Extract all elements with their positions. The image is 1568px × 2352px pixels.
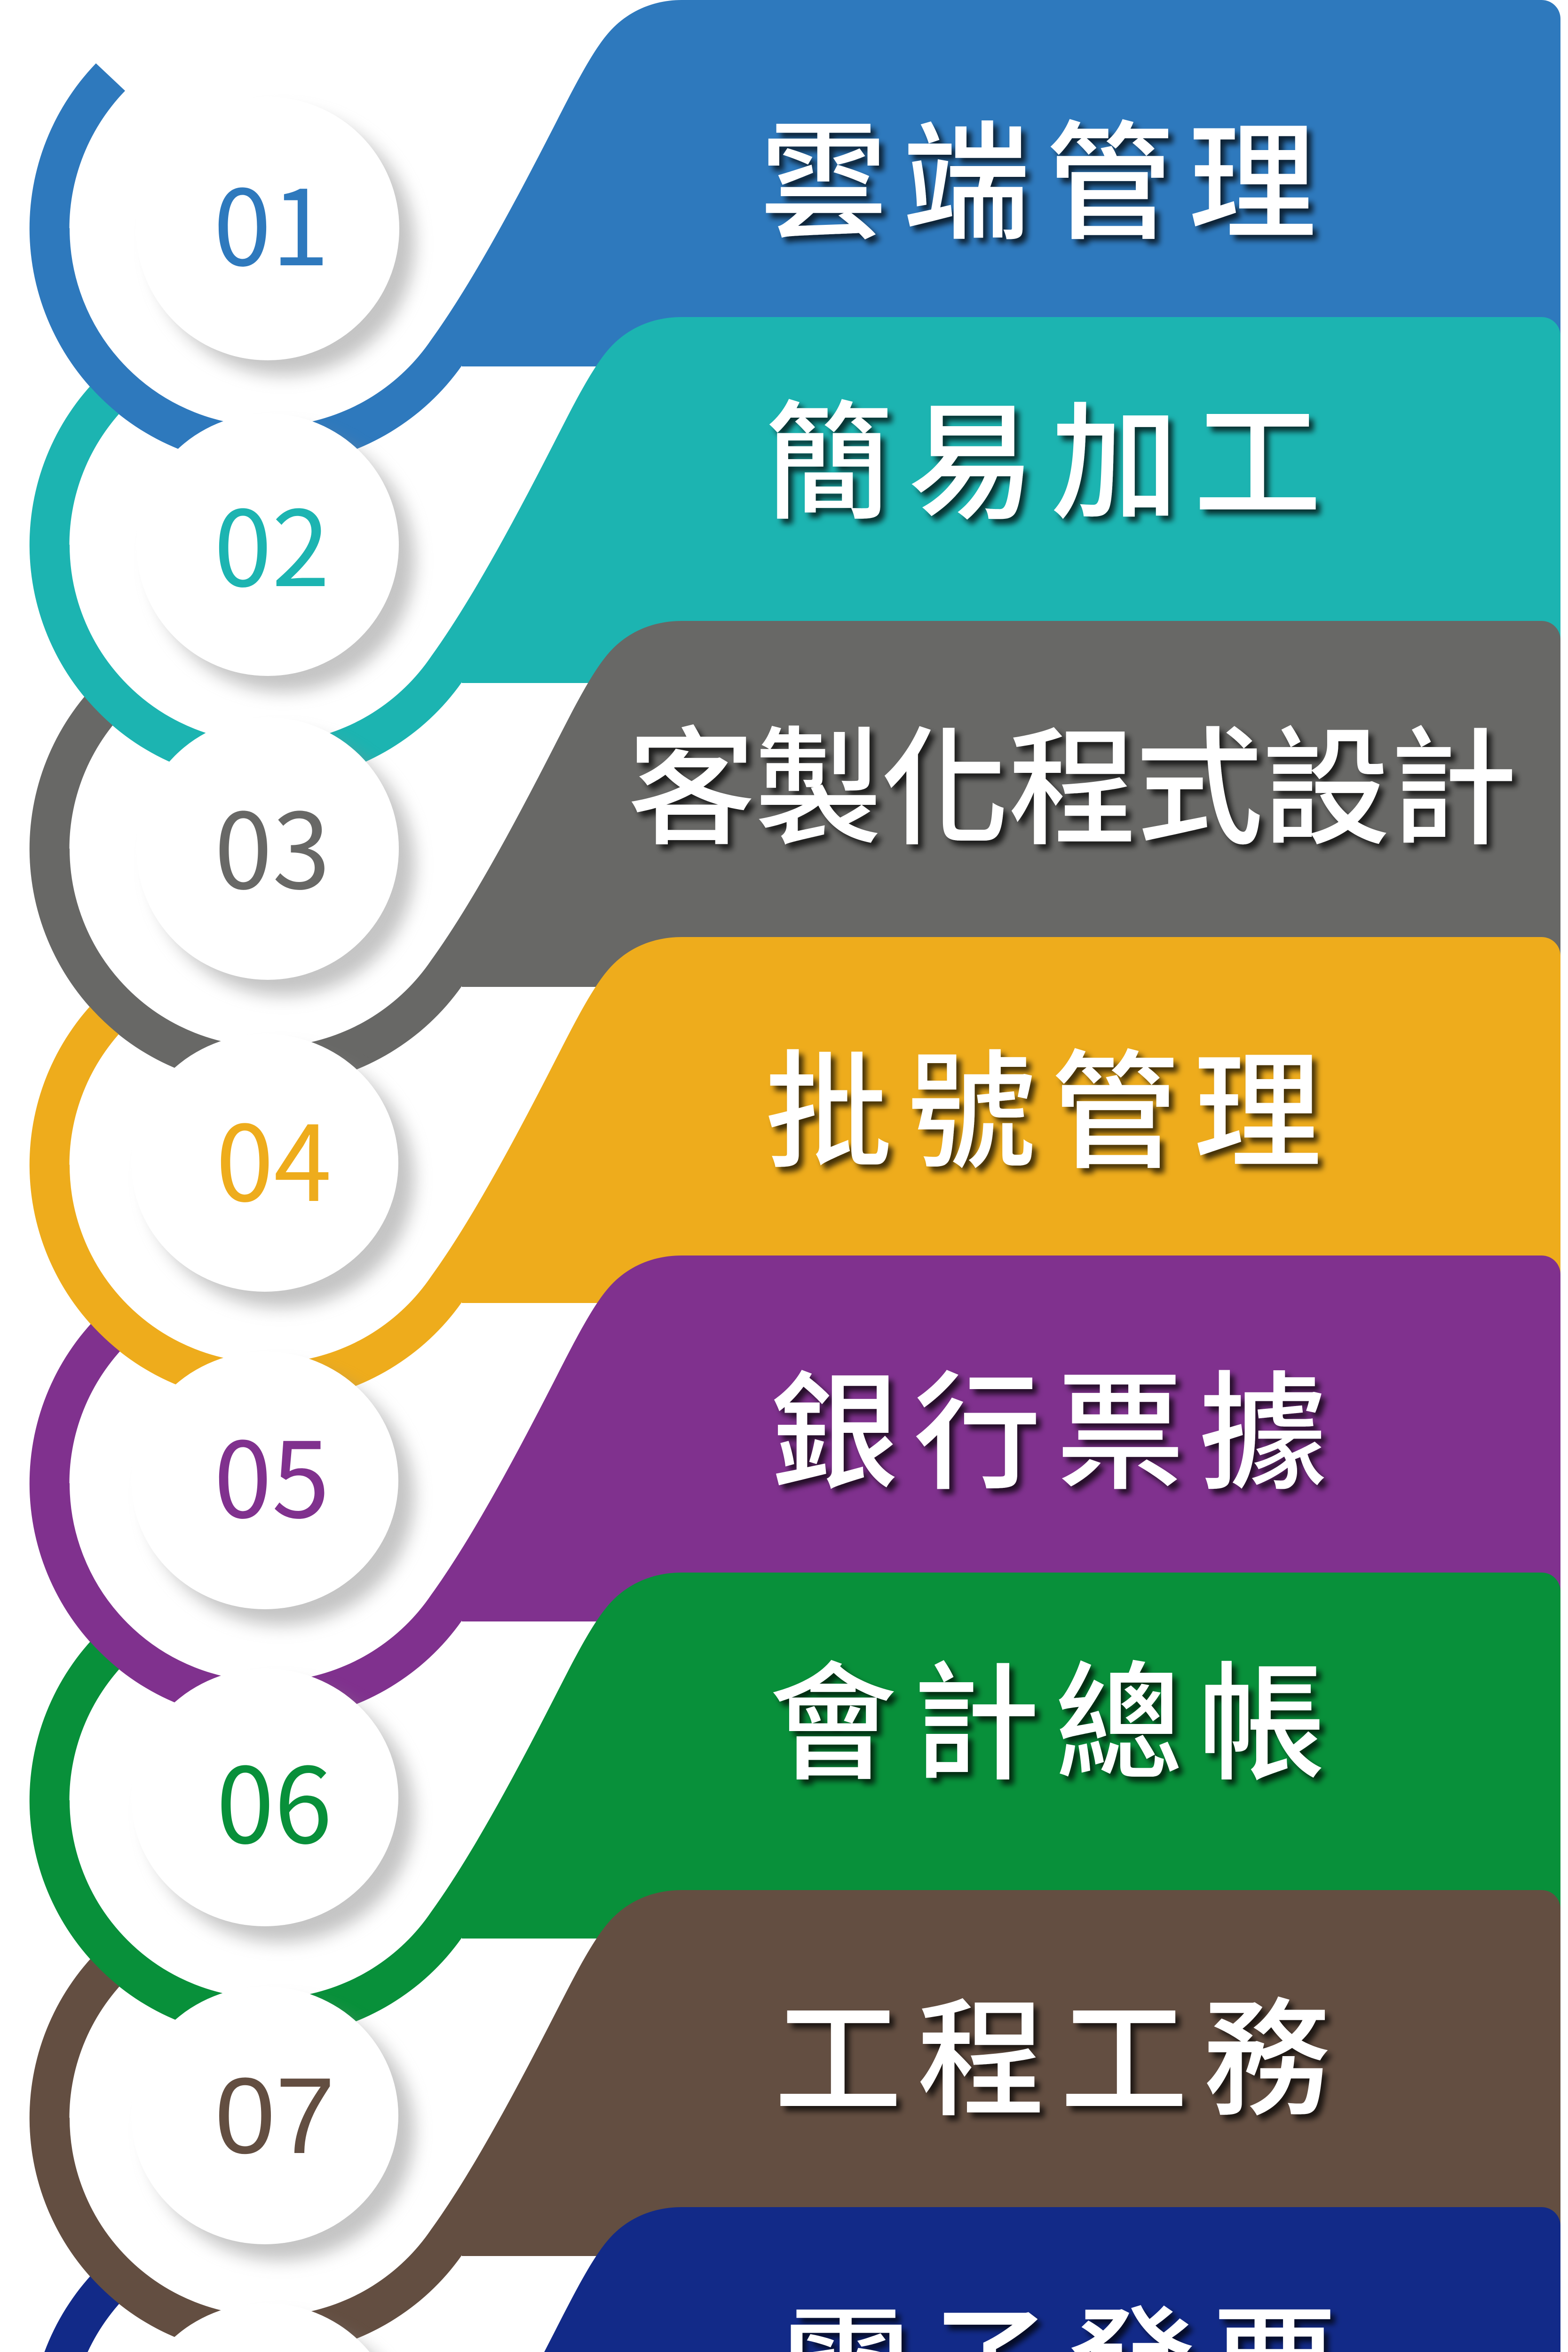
- band 02: [30, 317, 1560, 783]
- number circle 01: [136, 97, 415, 375]
- number circle 03: 03: [214, 767, 330, 919]
- band 08: [30, 2207, 1560, 2352]
- number circle 04: 04: [216, 1080, 332, 1231]
- number circle 08: [131, 2303, 414, 2352]
- band 06: [30, 1573, 1560, 2038]
- ring overlaps: each ring passes over the start of the next: [50, 228, 268, 2352]
- number circle 06: [131, 1669, 414, 1942]
- title 06: 會計總帳: [769, 1653, 1341, 1796]
- number circle 05: [131, 1351, 414, 1625]
- title 01: 雲端管理: [760, 112, 1331, 255]
- band 05: [30, 1255, 1560, 1721]
- title 05: 銀行票據: [770, 1362, 1342, 1505]
- title 07: 工程工務: [774, 1989, 1346, 2132]
- band 01: [30, 0, 1560, 466]
- title 02: 簡易加工: [765, 392, 1337, 535]
- number circle 05: 05: [214, 1396, 330, 1548]
- band 07: [30, 1890, 1560, 2352]
- band 03: [30, 621, 1560, 1087]
- number circle 07: 07: [215, 2055, 335, 2176]
- number circle 01: 01: [214, 144, 329, 295]
- number circle 06: 06: [216, 1722, 332, 1873]
- title 03: 客製化程式設計: [627, 718, 1516, 861]
- number circle 02: 02: [214, 465, 330, 616]
- number circle 02: [136, 413, 415, 692]
- number circle 07: [131, 1986, 414, 2260]
- number circle 03: [136, 717, 415, 996]
- band 04: [30, 937, 1560, 1403]
- title 04: 批號管理: [765, 1041, 1337, 1184]
- number circle 04: [131, 1034, 414, 1308]
